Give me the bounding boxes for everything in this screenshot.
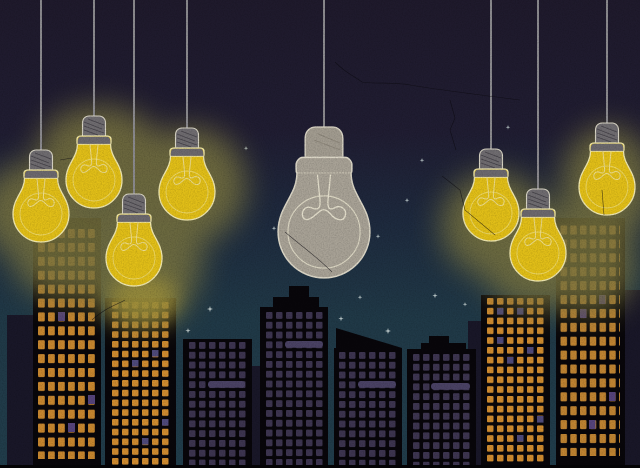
stars	[185, 125, 510, 334]
right bulb glow	[441, 127, 640, 314]
icon: bulb 7	[579, 123, 635, 215]
bright glow above building B	[107, 276, 179, 324]
cracks	[60, 62, 604, 320]
icon: bulb 4	[159, 128, 215, 220]
building A with lit windows	[33, 218, 101, 466]
icon: bulb 5	[463, 149, 519, 241]
left bulb glow	[0, 106, 246, 325]
building E with slanted roof	[334, 328, 402, 466]
building G with lit windows	[481, 295, 550, 466]
building H with lit windows	[556, 218, 625, 466]
cords	[41, 0, 607, 194]
icon: bulb 6	[510, 189, 566, 281]
ground strip	[0, 465, 640, 468]
icon: bulb 3	[106, 194, 162, 286]
icon: bulb 1	[13, 150, 69, 242]
background buildings	[7, 290, 640, 468]
building B with lit windows	[105, 298, 176, 466]
building C with dark windows	[183, 339, 252, 466]
icon: bulb 2	[66, 116, 122, 208]
building D with stepped roof	[260, 286, 328, 466]
building F with stepped roof	[407, 336, 476, 466]
icon: large unlit central bulb	[278, 127, 370, 278]
